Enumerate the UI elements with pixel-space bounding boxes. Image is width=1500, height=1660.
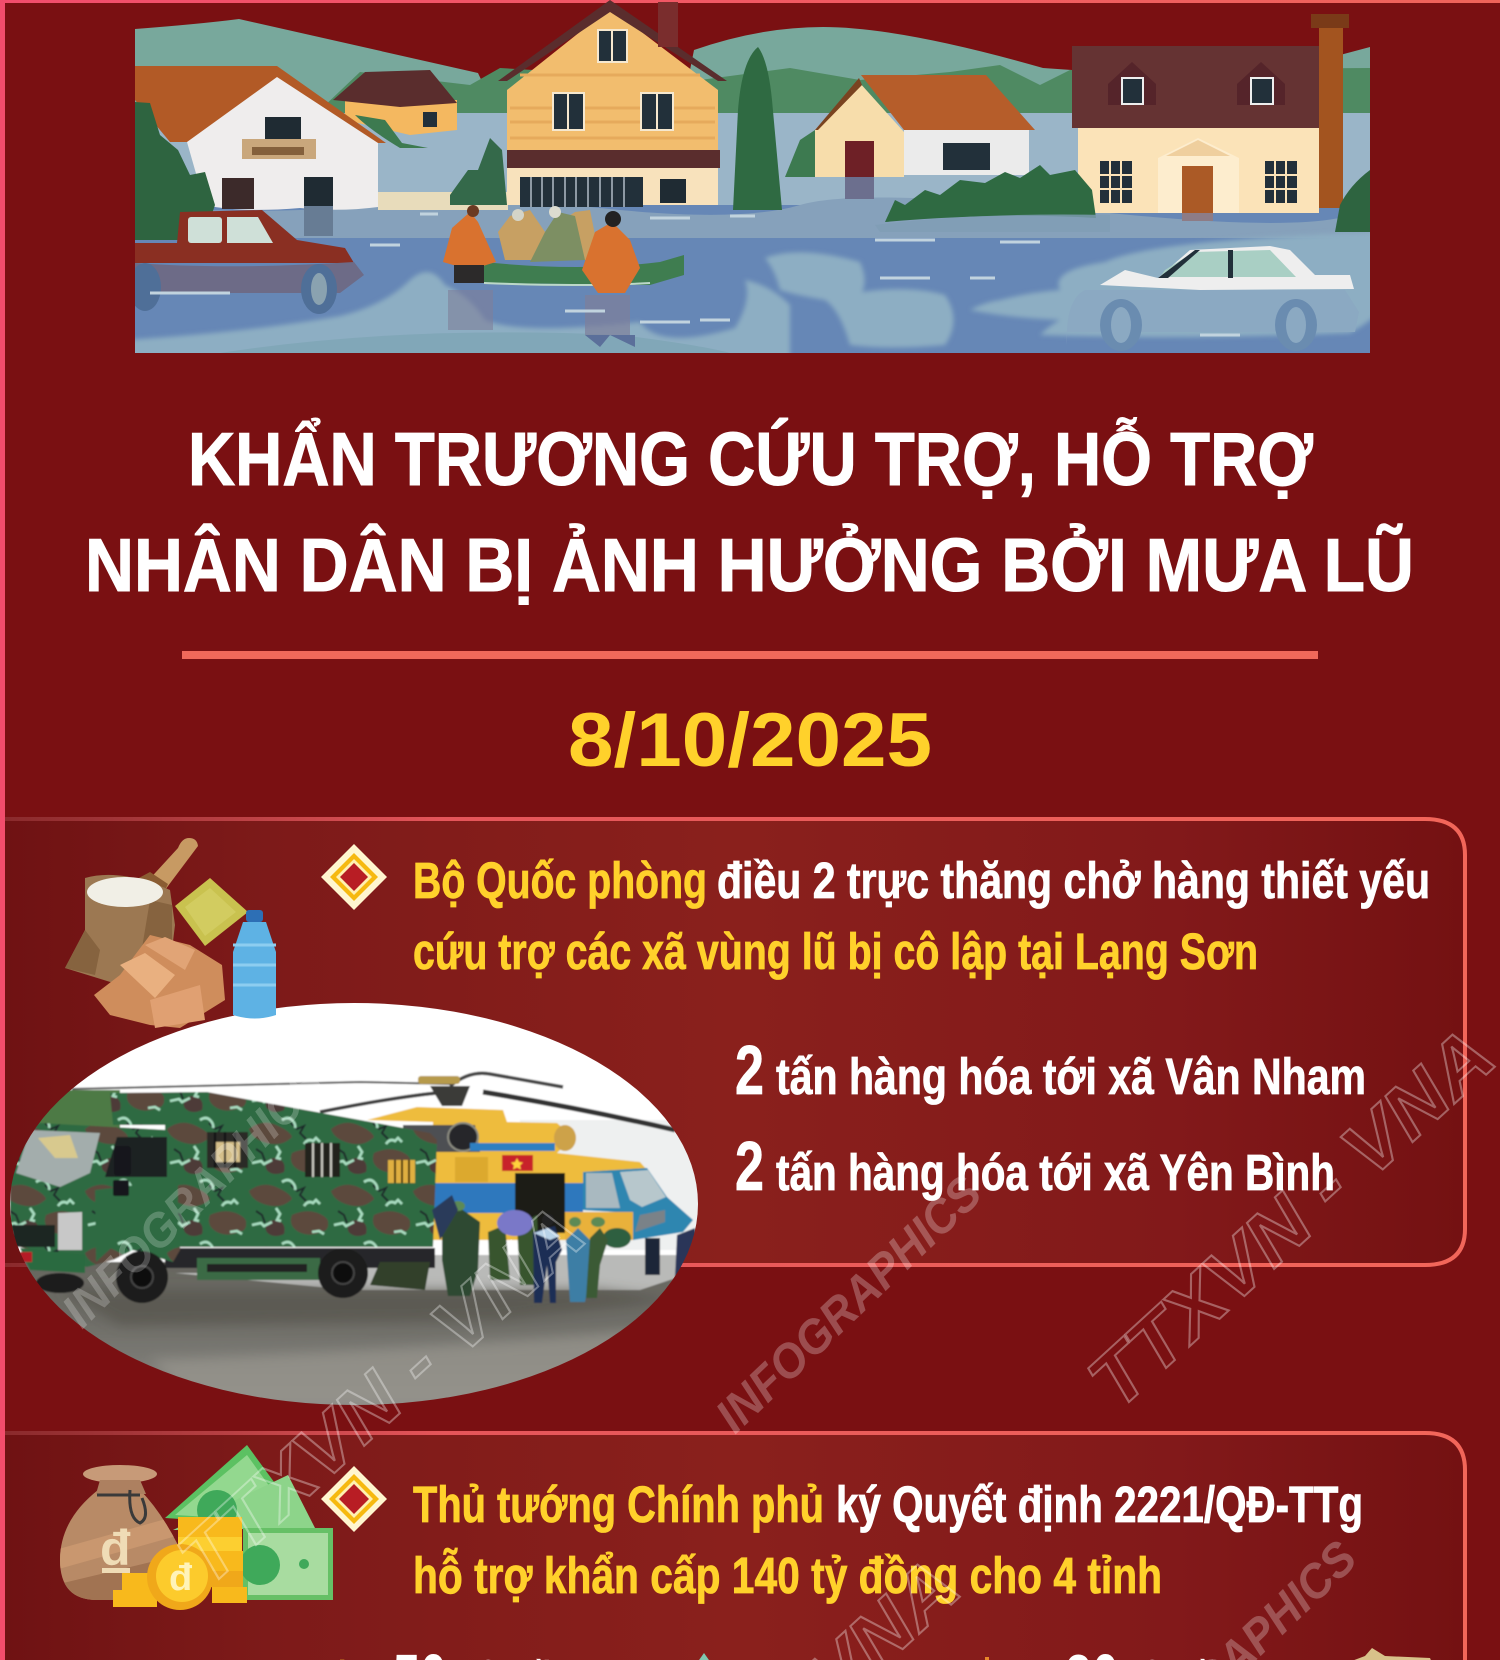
big yellow house [498,0,727,207]
icon: money bag, banknotes, coins: đ [100,1520,131,1576]
quantity: Yên Bình: tấn hàng hóa tới xã Yên Bình [776,1144,1335,1201]
quantity: Yên Bình [735,1127,1335,1205]
soldiers [370,1195,697,1303]
panel: Thủ tướng Chính phủ [5,1433,1465,1660]
white car [1067,246,1359,351]
text: Bộ Quốc phòng: Bộ Quốc phòng [413,852,707,909]
quantity: Vân Nham [735,1031,1366,1109]
title [85,417,1414,607]
watermarks: INFOGRAPHICS [52,1057,335,1338]
photo: military truck and helicopter [0,1000,710,1412]
date: 8/10/2025 [568,698,932,783]
quantity: Vân Nham: 2 [735,1031,764,1109]
text: Bộ Quốc phòng: cứu trợ các xã vùng lũ bị cô lập tại Lạng Sơn [413,923,1258,980]
truck [10,1092,437,1303]
rotor [72,1073,675,1130]
rescue boat and people [443,205,684,347]
water ripples [150,214,1240,335]
white house [135,66,386,236]
quantity: Yên Bình: 2 [735,1127,764,1205]
right house [1072,14,1349,221]
watermarks: INFOGRAPHICS [706,1166,992,1443]
watermarks [52,1013,1500,1660]
upper water [157,113,1370,205]
wheels [116,1251,168,1303]
lower water [135,205,1370,353]
text: Thủ tướng Chính phủ: ký Quyết định 2221/QĐ-TTg [836,1476,1363,1533]
illustration: flooded village [125,0,1380,360]
helicopter [367,1107,693,1248]
truck windows [207,1132,248,1168]
middle house [785,75,1035,199]
red car [129,210,364,314]
text: Bộ Quốc phòng [413,852,1430,980]
panel: Bộ Quốc phòng [0,819,1465,1412]
reeds [378,192,508,210]
text: Thủ tướng Chính phủ: Thủ tướng Chính phủ [413,1476,824,1533]
watermarks: TTXVN - VNA [1072,1013,1500,1425]
ground [24,1260,674,1405]
tree right edge [1335,170,1370,232]
icon: relief food and water [65,838,276,1028]
text: Thủ tướng Chính phủ [413,1476,1363,1604]
cypress tree [733,47,782,210]
icon: money bag, banknotes, coins [55,1445,333,1610]
icon: money bag, banknotes, coins: đ [169,1557,193,1599]
small house [333,70,457,148]
text: Thủ tướng Chính phủ: hỗ trợ khẩn cấp 140 tỷ đồng cho 4 tỉnh [413,1547,1162,1604]
mountains [135,19,1370,102]
allocation row (cropped at page edge) [150,1640,1435,1660]
watermarks: TTXVN - VNA [162,1190,601,1602]
tree left [135,102,215,240]
icon: diamond bullet [321,844,387,910]
title: KHẨN TRƯƠNG CỨU TRỢ, HỖ TRỢ [188,417,1313,501]
icon: diamond bullet [321,1466,387,1532]
bush [885,165,1096,222]
quantity: Vân Nham: tấn hàng hóa tới xã Vân Nham [776,1048,1366,1105]
trees [30,1090,120,1130]
